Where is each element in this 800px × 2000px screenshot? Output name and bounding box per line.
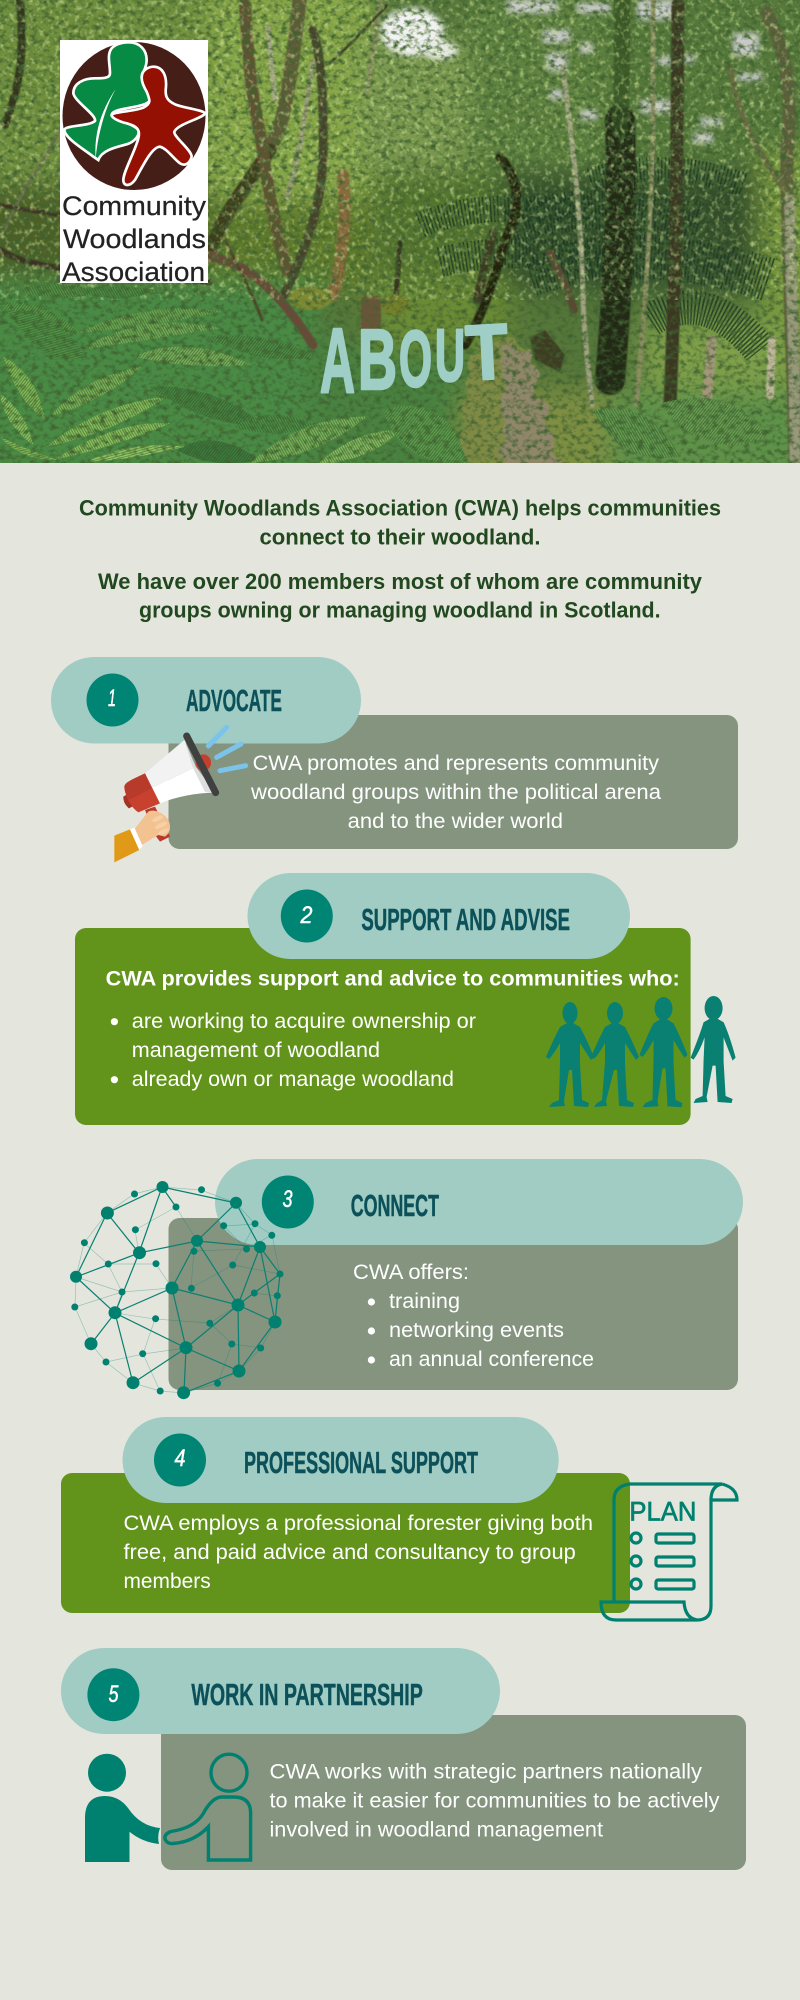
title: ABOUT: O (399, 314, 432, 403)
body text 1 (250, 752, 661, 833)
hero forest photo (0, 0, 800, 480)
text box 3 (168, 1218, 738, 1390)
path (460, 335, 560, 470)
intro text: Community Woodlands Association (CWA) helps communities (79, 496, 721, 521)
number badge 1 (86, 674, 138, 726)
heading pill 2 (248, 873, 630, 959)
icon: people holding hands (546, 996, 736, 1107)
lead text 2: CWA provides support and advice to communities who: (106, 968, 680, 991)
logo wordmark: Woodlands (63, 224, 206, 254)
heading: work in partnership: WORK IN PARTNERSHIP (191, 1677, 423, 1712)
text box 4 (61, 1473, 630, 1613)
sky glimpses (380, 0, 763, 143)
heading: connect: CONNECT (351, 1188, 439, 1223)
body text 5: involved in woodland management (270, 1819, 603, 1842)
heading pill 5 (61, 1648, 500, 1734)
heading pill 1 (51, 657, 361, 744)
body text 1: and to the wider world (348, 810, 563, 833)
icon: network globe (70, 1181, 284, 1399)
number badge 3 (262, 1176, 314, 1228)
heading: professional support: PROFESSIONAL SUPPORT (244, 1445, 478, 1480)
number badge 4 (154, 1434, 206, 1486)
title: ABOUT: B (358, 313, 397, 408)
icon: plan scroll (601, 1484, 737, 1620)
panel: 1 advocate (51, 657, 738, 862)
number badge 3: 3 (282, 1186, 293, 1213)
icon: solid person shaking hands (85, 1754, 160, 1862)
bullet list 3: networking events (389, 1319, 564, 1342)
text box 1 (168, 715, 738, 849)
number badge 4: 4 (174, 1445, 186, 1472)
ferns (0, 284, 767, 465)
bullet list 2: management of woodland (132, 1039, 380, 1062)
body text 5: CWA works with strategic partners nationally (270, 1761, 703, 1784)
bullet list 2: are working to acquire ownership or (132, 1010, 476, 1033)
heading pill 4 (122, 1417, 559, 1503)
heading pill 3 (215, 1159, 743, 1245)
body text 5: to make it easier for communities to be actively (270, 1790, 720, 1813)
body text 1: woodland groups within the political arena (250, 781, 661, 804)
title: ABOUT: A (320, 310, 355, 412)
icon: outlined person shaking hands (165, 1754, 251, 1860)
bullet list 3 (353, 1261, 594, 1371)
body text 5 (270, 1761, 720, 1842)
heading: advocate: ADVOCATE (186, 683, 282, 718)
body text 1: CWA promotes and represents community (253, 752, 660, 775)
body text 4: members (124, 1570, 211, 1593)
intro text: connect to their woodland. (260, 524, 540, 549)
logo figure (112, 67, 205, 185)
bullet list 2: already own or manage woodland (132, 1068, 454, 1091)
intro text (79, 496, 721, 623)
panel: 2 support and advise (75, 873, 736, 1125)
text box 5 (161, 1715, 746, 1870)
logo wordmark: Association (62, 257, 205, 287)
moss rocks and stumps (288, 286, 565, 372)
logo wordmark: Community (62, 191, 207, 221)
panel: 5 work in partnership (61, 1648, 746, 1870)
body text 4: CWA employs a professional forester giving both (124, 1512, 593, 1535)
heading: support and advise: SUPPORT AND ADVISE (361, 902, 570, 937)
icon: plan scroll: PLAN (629, 1497, 696, 1527)
body text 4: free, and paid advice and consultancy to group (124, 1541, 576, 1564)
panel: 3 connect (70, 1159, 743, 1399)
bullet list 3: CWA offers: (353, 1261, 469, 1284)
fir foliage (420, 169, 770, 350)
title: ABOUT: U (435, 314, 465, 397)
number badge 1: 1 (108, 685, 116, 712)
tree trunks (0, 0, 795, 460)
bullet list 3: an annual conference (389, 1348, 594, 1371)
panel: 4 professional support (61, 1417, 737, 1620)
bullet list 2 (111, 1010, 476, 1091)
body text 4 (124, 1512, 593, 1593)
bullet list 3: training (389, 1290, 460, 1313)
number badge 2: 2 (300, 902, 312, 929)
logo leaf (64, 42, 150, 160)
intro text: We have over 200 members most of whom are community (98, 569, 703, 594)
logo leaf vein (95, 89, 116, 158)
number badge 5: 5 (108, 1681, 119, 1708)
number badge 5 (87, 1668, 139, 1721)
hero bottom edge (0, 463, 800, 464)
title: ABOUT: T (464, 307, 510, 397)
text box 2 (75, 928, 691, 1125)
title: ABOUT (320, 307, 510, 412)
logo wordmark (62, 191, 207, 287)
icon: megaphone (114, 727, 246, 862)
intro text: groups owning or managing woodland in Scotland. (139, 598, 661, 623)
number badge 2 (281, 890, 333, 942)
logo (60, 40, 208, 287)
